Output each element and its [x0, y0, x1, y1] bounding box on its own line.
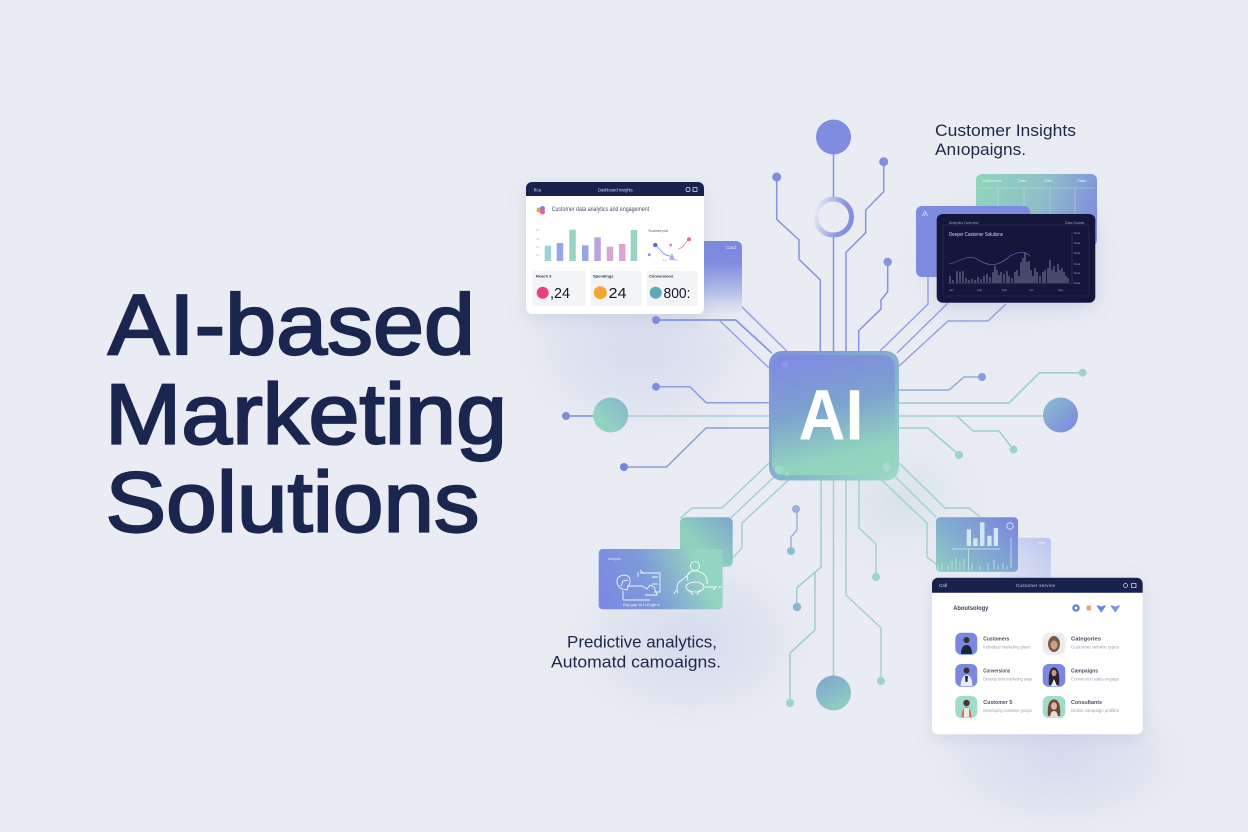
- dashboard icon: [536, 206, 545, 214]
- profile row: avatar 1: [955, 633, 1031, 655]
- profile row: avatar 2: Customer service types: [1071, 644, 1120, 650]
- panel: dark analytics chart: Analytics Overview: [949, 221, 979, 225]
- right circle node: [1043, 398, 1078, 432]
- dashboard heading: Customer data analytics and engagement: [552, 207, 649, 213]
- spike chart: Data: [1074, 231, 1081, 235]
- profile row: avatar 4: Conversion rates engage: [1071, 676, 1119, 682]
- dashboard header: Dashboard Insights: [598, 188, 633, 192]
- panel: campaign illustration card: Analysis: [608, 557, 621, 561]
- KPI card 3: Conversions: [649, 274, 674, 278]
- bar chart: 10: [536, 253, 540, 257]
- panel: faded back card: [1000, 538, 1051, 582]
- small bars: [967, 522, 998, 546]
- line illustration right: [674, 562, 722, 595]
- scatter chart: Jul: [674, 258, 678, 262]
- callout: customer insights: [935, 121, 1076, 159]
- profile row: avatar 6: Online campaign profiles: [1071, 708, 1120, 713]
- profile row: avatar 4: [1043, 664, 1119, 687]
- callout: predictive analytics: Automatd camoaigns.: [551, 653, 721, 672]
- circuit traces bottom: [680, 463, 980, 703]
- panel: analytics dashboard: [526, 182, 704, 314]
- AI chip: [769, 351, 899, 480]
- KPI card 1: Reach 3: [536, 274, 552, 278]
- KPI card 1: ,24: [550, 285, 570, 302]
- title: [105, 278, 507, 550]
- profile row: avatar 1: Individual marketing plans: [983, 644, 1031, 650]
- panel: faded back card: Stat: [1038, 540, 1046, 545]
- line illustration left: [617, 570, 660, 600]
- profile row: avatar 6: [1043, 696, 1120, 718]
- panel: small bar chart card: [936, 517, 1018, 572]
- KPI card 1: [533, 271, 586, 306]
- profiles header: [932, 578, 1143, 593]
- spike chart: Data: [1074, 241, 1081, 245]
- scatter chart: Scatterplot: [648, 228, 669, 233]
- KPI card 3: [647, 271, 698, 306]
- panel: customer profiles: [932, 578, 1143, 734]
- profile row: avatar 5: Developing customer groups: [983, 708, 1033, 713]
- ring node: [816, 199, 852, 235]
- panel: purple card behind dashboard: Card: [726, 245, 736, 250]
- panel: purple back card: [916, 206, 1030, 277]
- bar chart: 60: [536, 228, 540, 232]
- panel: dark analytics chart: [937, 214, 1095, 303]
- panel: campaign illustration card: [599, 549, 723, 609]
- title: Solutions: [106, 456, 480, 550]
- circuit traces top: [656, 150, 1006, 368]
- social icons: [1072, 604, 1119, 612]
- spike chart: May: [1058, 288, 1064, 292]
- dashboard header: [526, 182, 704, 196]
- bottom circle node: [816, 676, 851, 710]
- top circle node: [816, 120, 851, 154]
- profile row: avatar 3: Develop best marketing ways: [983, 676, 1033, 682]
- profile row: avatar 2: Categories: [1071, 636, 1101, 642]
- spike chart: Data: [1074, 281, 1081, 285]
- spike chart: Mar: [1002, 288, 1007, 292]
- bar chart: 40: [536, 237, 540, 241]
- profiles heading: Aboutsology: [953, 606, 989, 612]
- spike chart: Feb: [977, 288, 983, 292]
- chip label: AI: [798, 376, 864, 456]
- panel: campaign illustration card: Big gap to h.Engine: [623, 602, 661, 607]
- panel: green back card: [976, 174, 1097, 246]
- KPI card 2: 24: [608, 285, 626, 302]
- KPI card 2: Spendings: [593, 274, 614, 278]
- profile row: avatar 5: [955, 696, 1033, 718]
- circuit traces sides: [566, 373, 1083, 467]
- panel: green back card: Data: [1044, 178, 1053, 183]
- profiles header: Cafl: [939, 583, 947, 588]
- callout: customer insights: Customer Insights: [935, 121, 1076, 140]
- KPI card 3: 800:: [664, 285, 690, 302]
- panel: green back card: Customers: [982, 178, 1001, 183]
- profile row: avatar 3: [955, 664, 1033, 687]
- spike chart: [947, 231, 1081, 292]
- profile row: avatar 3: Conversions: [983, 668, 1010, 674]
- spike chart: Data: [1074, 251, 1081, 255]
- callout: predictive analytics: Predictive analytics,: [567, 633, 717, 652]
- left circle node: [593, 398, 628, 432]
- callout: predictive analytics: [551, 633, 721, 672]
- spike chart: Data: [1074, 262, 1081, 266]
- KPI card 2: [591, 271, 642, 306]
- title: Marketing: [105, 368, 507, 462]
- dashboard header: fica: [534, 188, 542, 192]
- callout: customer insights: Anıopaigns.: [935, 140, 1026, 159]
- panel: green back card: Data: [1018, 178, 1027, 183]
- profiles header: Customer service: [1016, 583, 1055, 588]
- node dots: [562, 157, 1087, 707]
- scatter chart: [648, 228, 691, 262]
- panel: dark analytics chart: Data Source: [1065, 221, 1085, 225]
- spike chart: Jan: [949, 288, 954, 292]
- spike chart: Data: [1074, 271, 1081, 275]
- profile row: avatar 1: Customers: [983, 636, 1010, 642]
- bar chart: 20: [536, 245, 540, 249]
- panel: green back card: Stats: [1077, 178, 1086, 183]
- bar chart: [536, 228, 637, 261]
- profile row: avatar 4: Campaigns: [1071, 668, 1098, 674]
- spike chart: Apr: [1029, 288, 1034, 292]
- title: AI-based: [108, 278, 475, 373]
- panel: teal back card: [680, 517, 733, 567]
- profile row: avatar 6: Consultants: [1071, 700, 1102, 706]
- profile row: avatar 5: Customer 5: [983, 700, 1013, 706]
- profile row: avatar 2: [1043, 633, 1120, 655]
- panel: purple card behind dashboard: [690, 241, 742, 313]
- dark chart heading: Deeper Customer Solutions: [949, 232, 1003, 238]
- scatter chart: Jun: [662, 258, 667, 262]
